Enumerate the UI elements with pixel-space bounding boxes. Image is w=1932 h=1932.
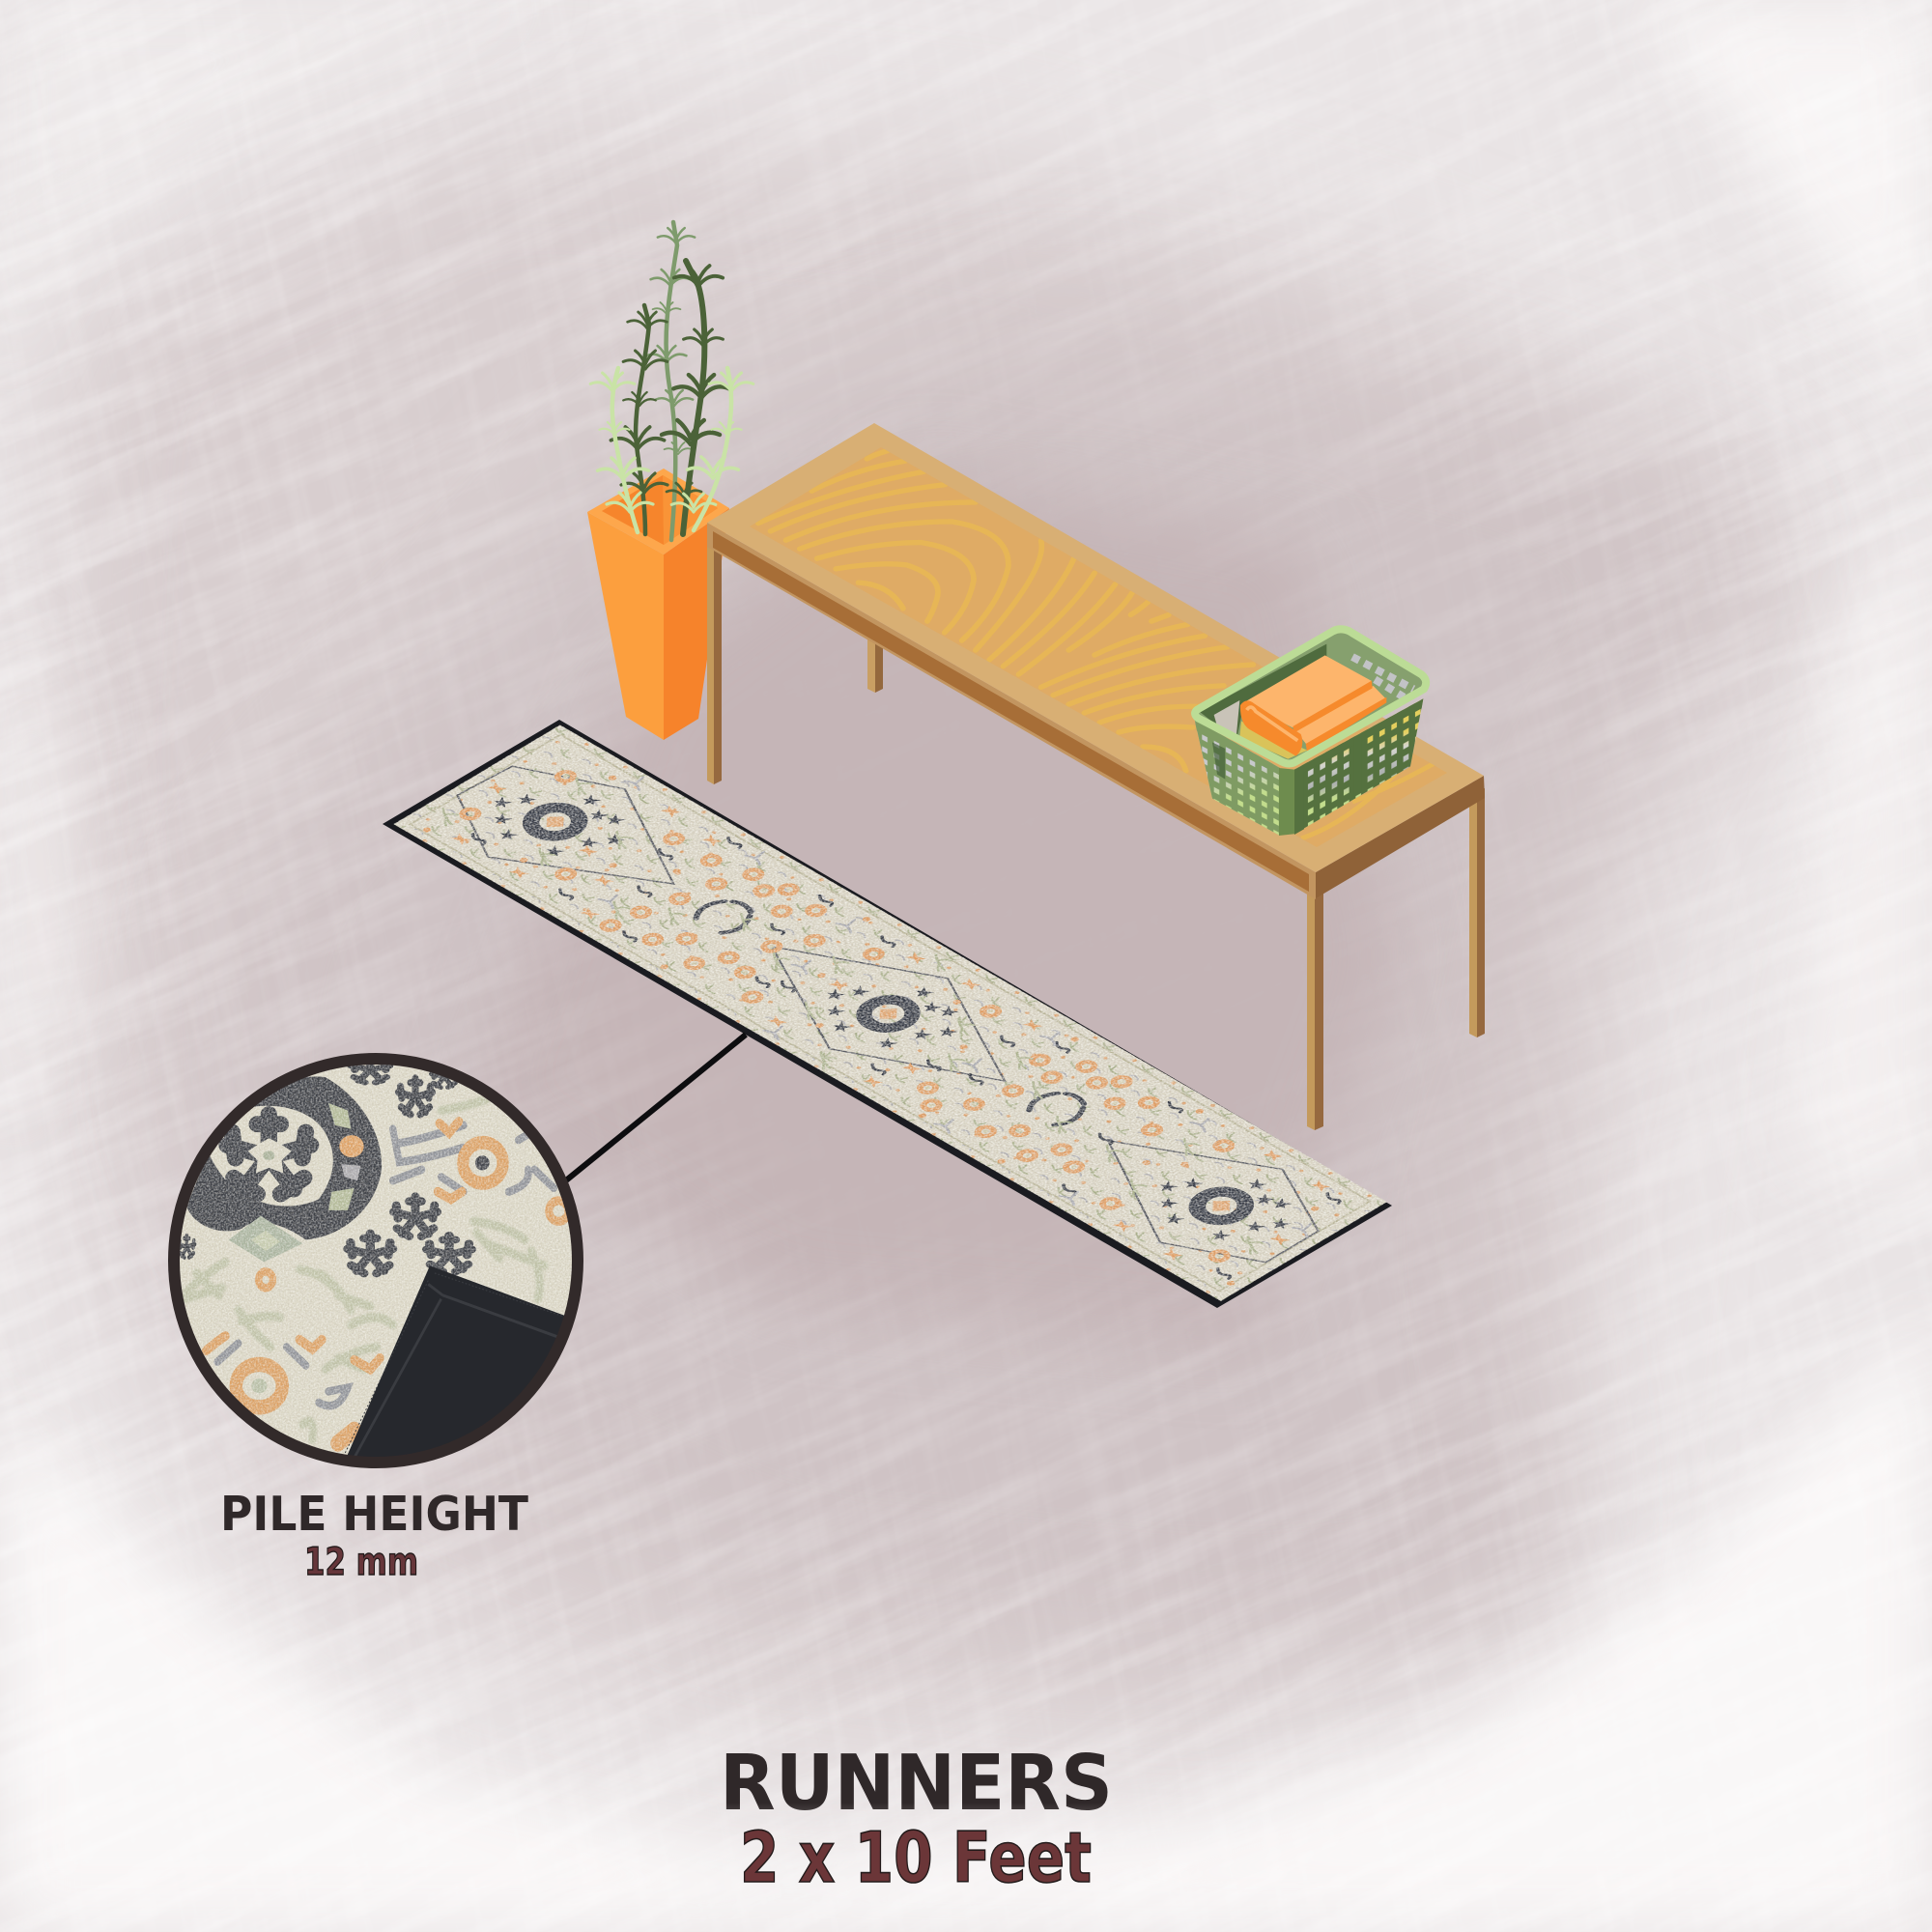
basket inner walls [1193,626,1430,766]
rug black border [383,720,1392,1308]
close-up flower centres [251,1155,490,1393]
label: pile height value: 12 mm [304,1541,418,1584]
close-up dark leaf clusters [179,1055,471,1273]
icon: orange planter [587,469,729,740]
basket rim [1195,629,1426,763]
close-up orange flowers [206,1122,568,1443]
table [707,423,1485,1130]
table apron [707,523,1485,899]
rug medallion 2 [713,911,1065,1116]
table leg: front left [707,529,722,784]
close-up rug texture [164,1048,602,1502]
icon: laundry basket with towels [1193,626,1430,836]
wood grain [758,451,1435,838]
planter with plant [587,222,753,740]
table leg: front [1307,893,1323,1130]
close-up medallion [186,1076,382,1262]
table leg: right [1469,787,1485,1037]
rug runner [383,720,1392,1308]
table top surface [707,423,1484,872]
close-up green washes [184,1099,544,1439]
basket right face [1279,698,1423,836]
towels [1239,655,1386,759]
table top wood panel [750,447,1447,847]
close-up pile texture [164,1048,589,1473]
table leg: back [867,633,883,693]
rug backing: black folded corner [338,1265,602,1502]
rug dark centre motifs [691,895,1094,1128]
title: runners: RUNNERS [720,1739,1113,1828]
subtitle: size: 2 x 10 Feet [740,1817,1092,1898]
rug pile texture [394,725,1387,1301]
rug woven face [394,725,1387,1301]
rug floral scatter [409,734,1377,1295]
plant stems [590,222,753,540]
detail circle: pile close-up [164,1048,602,1502]
rug medallion 3 [1047,1104,1353,1283]
rug medallion 1 [456,765,675,885]
detail circle ring [174,1059,578,1463]
basket left face [1195,720,1280,836]
close-up grey branches [217,1125,554,1406]
connector line from rug to detail circle [561,1035,746,1184]
label: pile height: PILE HEIGHT [220,1487,529,1542]
